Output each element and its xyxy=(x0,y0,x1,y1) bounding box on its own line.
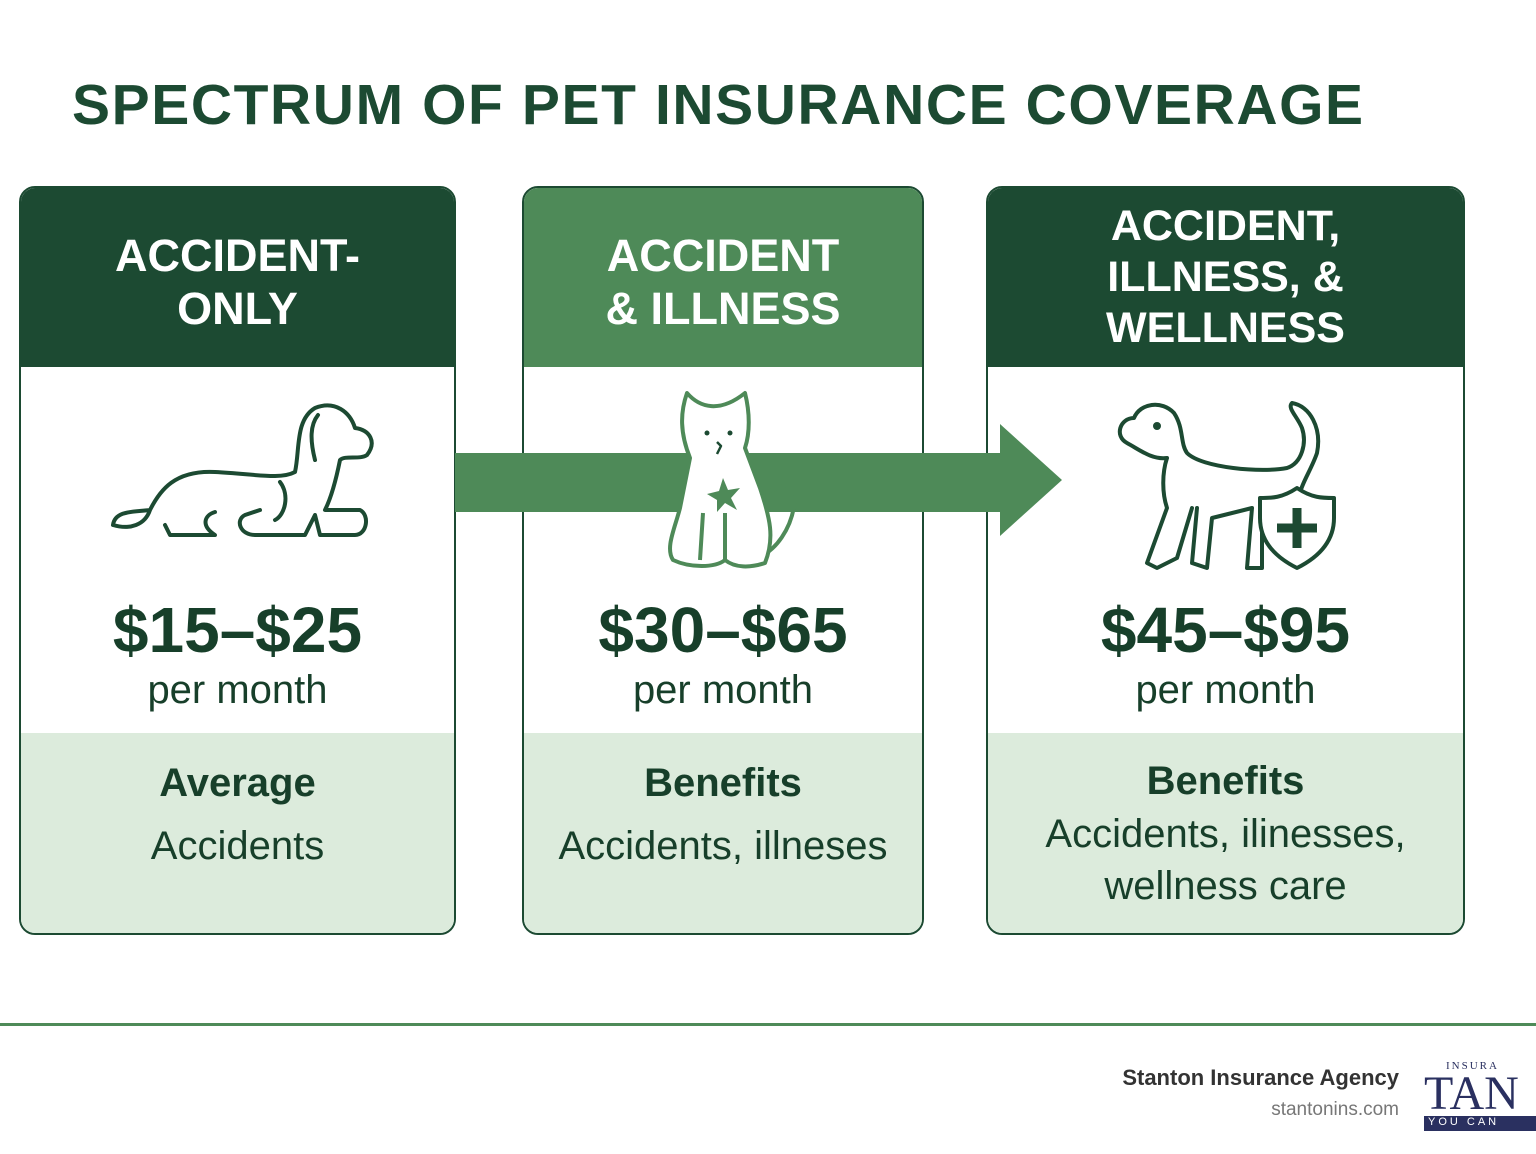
title: SPECTRUM OF PET INSURANCE COVERAGE xyxy=(72,73,1365,137)
price: $30–$65 xyxy=(598,594,848,666)
header: & ILLNESS xyxy=(605,282,841,334)
icon: dog with shield xyxy=(1118,401,1336,570)
footer: Benefits xyxy=(1147,759,1304,803)
footer: Accidents, ilinesses, xyxy=(1045,812,1406,856)
panel: accident illness wellness xyxy=(986,186,1465,935)
footer: Accidents, illneses xyxy=(558,824,888,868)
logo: TAN xyxy=(1424,1067,1519,1120)
footer: Average xyxy=(159,761,316,805)
header: ILLNESS, & xyxy=(1107,253,1344,301)
header: WELLNESS xyxy=(1106,304,1345,352)
header: ACCIDENT- xyxy=(115,230,360,280)
footer xyxy=(21,733,454,933)
per month: per month xyxy=(633,668,813,712)
per month: per month xyxy=(1135,668,1316,712)
price: $45–$95 xyxy=(1101,594,1350,666)
header xyxy=(988,188,1463,367)
footer: Benefits xyxy=(644,761,802,805)
website: stantonins.com xyxy=(1271,1099,1399,1120)
header: ONLY xyxy=(177,282,298,334)
panel: accident & illness xyxy=(522,186,924,935)
footer: Accidents xyxy=(151,824,324,868)
arrow xyxy=(455,424,1062,536)
header: ACCIDENT xyxy=(607,230,839,280)
logo xyxy=(1424,1060,1536,1131)
logo: YOU CAN xyxy=(1428,1116,1499,1128)
footer: wellness care xyxy=(1104,864,1347,908)
header: ACCIDENT, xyxy=(1111,202,1340,250)
footer xyxy=(524,733,922,933)
panel: accident-only xyxy=(19,186,456,935)
logo: INSURA xyxy=(1446,1060,1499,1072)
header xyxy=(21,188,454,367)
divider xyxy=(0,1023,1536,1026)
price: $15–$25 xyxy=(113,594,362,666)
header xyxy=(524,188,922,367)
icon: dog lying xyxy=(110,403,374,537)
company name: Stanton Insurance Agency xyxy=(1122,1065,1399,1090)
per month: per month xyxy=(147,668,328,712)
icon: cat xyxy=(668,390,795,568)
footer xyxy=(988,733,1463,933)
